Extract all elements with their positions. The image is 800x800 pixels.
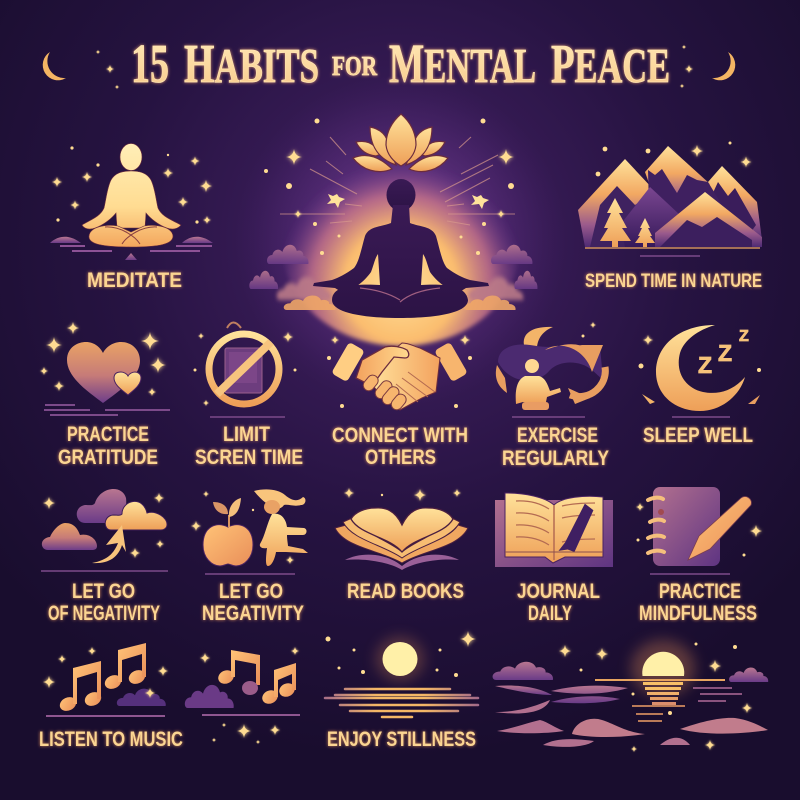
icon: crescent moon and Z's: Z — [718, 340, 732, 366]
label: gratitude: GRATITUDE — [58, 446, 158, 469]
panel: apple and figure — [191, 489, 308, 625]
panel: music notes with cloud — [185, 647, 300, 744]
label: of negativity: OF NEGATIVITY — [48, 602, 160, 625]
icon: crossed-out tablet — [194, 322, 296, 417]
label: regularly: REGULARLY — [502, 447, 609, 470]
knee creases — [360, 288, 440, 302]
decorations: apple sparkles — [191, 491, 295, 574]
icon: mountains and trees — [578, 142, 762, 256]
panel: central meditating figure — [236, 75, 566, 405]
label: daily: DAILY — [528, 602, 572, 625]
icon: sunset scene — [493, 640, 768, 752]
label: scren time: SCREN TIME — [195, 446, 303, 469]
label: meditate: MEDITATE — [87, 269, 182, 292]
title — [131, 33, 670, 94]
label: enjoy stillness: ENJOY STILLNESS — [327, 728, 476, 751]
label: limit: LIMIT — [223, 423, 270, 446]
icon: apple — [203, 498, 253, 566]
light rays — [280, 137, 515, 225]
silhouette — [313, 179, 489, 318]
label: negativity: NEGATIVITY — [202, 602, 304, 625]
panel: enjoy stillness — [325, 631, 478, 751]
label: mindfulness: MINDFULNESS — [639, 602, 757, 625]
panel: sleep well — [638, 325, 761, 447]
icon: notebook and pencil — [636, 487, 762, 574]
title word: Habits: HABITS — [184, 33, 319, 94]
label: listen to music: LISTEN TO MUSIC — [39, 728, 183, 751]
icon: second music notes — [185, 647, 300, 744]
label: connect with: CONNECT WITH — [332, 424, 468, 447]
panel: meditate — [50, 144, 213, 292]
icon: moon over water — [325, 631, 478, 717]
panel: journal daily — [495, 493, 613, 625]
icon: running figure — [254, 489, 308, 566]
icon: lotus — [353, 114, 448, 172]
icon: crescent moon and Z's: Z — [739, 328, 749, 345]
title word: Mental: MENTAL — [389, 33, 536, 94]
panel: connect with others — [327, 335, 472, 469]
panel: spend time in nature — [578, 142, 762, 292]
icon: meditating person — [50, 144, 213, 260]
halo glow — [283, 150, 519, 346]
panel: sunset over water — [493, 640, 768, 752]
label: let go: LET GO — [72, 580, 135, 603]
label: read books: READ BOOKS — [347, 580, 464, 603]
title word: 15: 15 — [131, 33, 169, 94]
label: exercise: EXERCISE — [517, 424, 598, 447]
clouds — [249, 245, 537, 310]
icon: open book — [335, 488, 468, 570]
icon: exercise loop — [496, 322, 605, 417]
icon: crescent moon and Z's — [638, 325, 761, 417]
label: journal: JOURNAL — [517, 580, 600, 603]
icon: hearts — [40, 322, 170, 415]
haze glow — [236, 75, 566, 405]
label: let go second: LET GO — [219, 580, 283, 603]
panel: listen to music — [39, 643, 183, 751]
panel: practice gratitude — [40, 322, 170, 469]
title decorations: moons and stars — [43, 45, 735, 89]
title word: for: FOR — [332, 51, 377, 81]
label: practice: PRACTICE — [67, 423, 149, 446]
label: practice second: PRACTICE — [659, 580, 741, 603]
panel: read books — [335, 488, 468, 603]
panel: exercise regularly — [496, 322, 609, 470]
panel: practice mindfulness — [636, 487, 762, 625]
icon: clouds with arrow — [41, 489, 168, 571]
panel: let go of negativity — [41, 489, 168, 625]
icon: music notes — [43, 643, 168, 716]
label: others: OTHERS — [365, 446, 436, 469]
stars — [264, 118, 514, 255]
z small letters: Z — [698, 352, 712, 378]
icon: handshake — [327, 335, 472, 412]
panel: limit screen time — [194, 322, 303, 469]
title word: Peace: PEACE — [551, 33, 670, 94]
icon: journal with pen — [495, 493, 613, 567]
label: sleep well: SLEEP WELL — [643, 424, 753, 447]
